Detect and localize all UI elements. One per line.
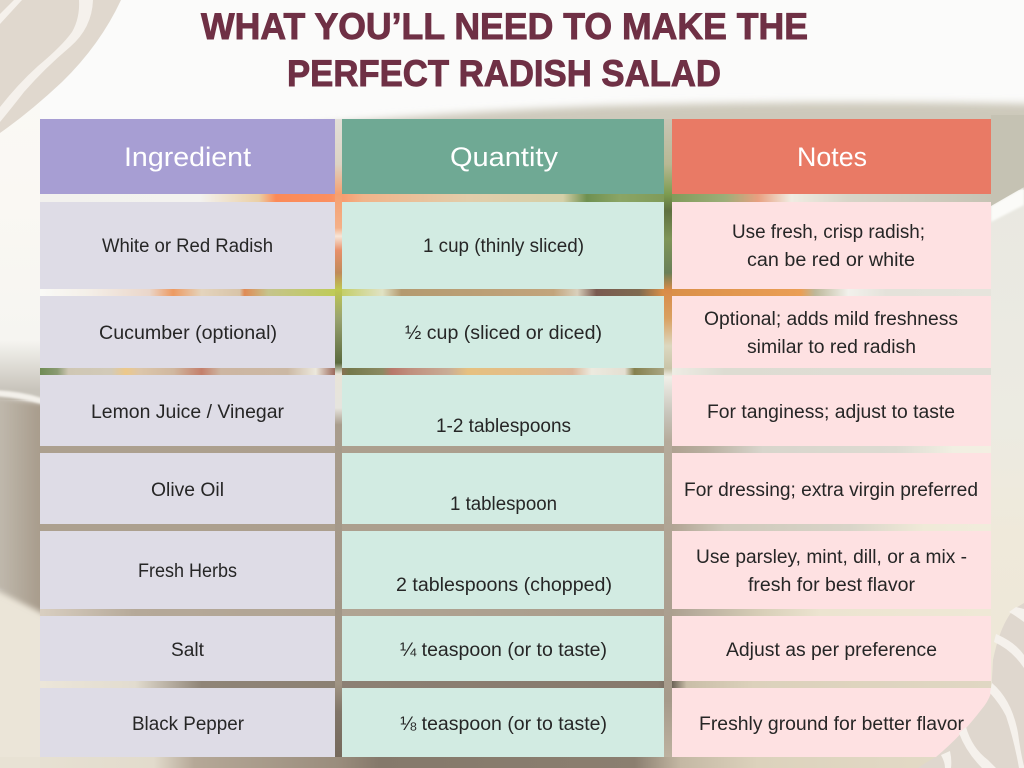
- row: cucumber: Optional; adds mild freshness: [704, 309, 958, 330]
- row: lemon juice or vinegar: For tanginess; adjust to taste: [707, 402, 955, 423]
- table header: quantity: [342, 119, 664, 194]
- row: lemon juice or vinegar: Lemon Juice / Vinegar: [91, 402, 285, 423]
- row: black pepper: Freshly ground for better flavor: [699, 714, 965, 735]
- row: salt: ¼ teaspoon (or to taste): [400, 640, 607, 661]
- decoration: bottom-right leaf: [918, 603, 1024, 768]
- table header: notes: Notes: [797, 142, 867, 172]
- row: salt: [40, 616, 991, 681]
- row: black pepper: [40, 688, 991, 757]
- row: cucumber: Cucumber (optional): [99, 323, 277, 344]
- row: salt: Salt: [171, 640, 205, 661]
- row: olive oil: Olive Oil: [151, 480, 224, 501]
- row: fresh herbs: [40, 531, 991, 609]
- row: white or red radish: White or Red Radish: [102, 236, 273, 257]
- table header: notes: [672, 119, 991, 194]
- row: fresh herbs: 2 tablespoons (chopped): [396, 575, 612, 596]
- row: white or red radish: can be red or white: [747, 250, 915, 271]
- row: black pepper: ⅛ teaspoon (or to taste): [400, 714, 607, 735]
- row: fresh herbs: Fresh Herbs: [138, 561, 237, 582]
- table header: ingredient: Ingredient: [124, 142, 252, 172]
- row: cucumber: ½ cup (sliced or diced): [405, 323, 602, 344]
- title: PERFECT RADISH SALAD: [287, 53, 721, 94]
- row: olive oil: For dressing; extra virgin preferred: [684, 480, 978, 501]
- table header: ingredient: [40, 119, 335, 194]
- row: salt: Adjust as per preference: [726, 640, 937, 661]
- background: salad colours in table gaps: [40, 119, 991, 757]
- row: black pepper: Black Pepper: [132, 714, 245, 735]
- title: WHAT YOU’LL NEED TO MAKE THE: [201, 6, 808, 47]
- row: fresh herbs: fresh for best flavor: [748, 575, 916, 596]
- row: fresh herbs: Use parsley, mint, dill, or a mix -: [696, 547, 967, 568]
- row: cucumber: [40, 296, 991, 368]
- row: lemon juice or vinegar: [40, 375, 991, 446]
- row: cucumber: similar to red radish: [747, 337, 916, 358]
- row: lemon juice or vinegar: 1-2 tablespoons: [436, 416, 571, 437]
- row: olive oil: [40, 453, 991, 524]
- row: white or red radish: 1 cup (thinly sliced): [423, 236, 584, 257]
- row: olive oil: 1 tablespoon: [450, 494, 557, 515]
- decoration: top-left leaf: [0, 0, 121, 133]
- row: white or red radish: [40, 202, 991, 289]
- row: white or red radish: Use fresh, crisp radish;: [732, 222, 925, 243]
- title: [201, 6, 808, 94]
- table header: quantity: Quantity: [450, 142, 559, 172]
